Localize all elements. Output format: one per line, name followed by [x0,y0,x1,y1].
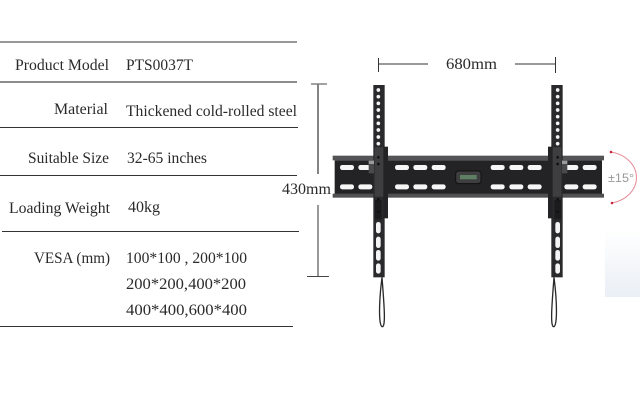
height dimension: 430mm: 430mm [282,181,331,198]
row: VESA: 200*200,400*200 [126,276,246,293]
row: material [54,101,297,120]
row: loading weight [9,199,160,217]
width dimension: 680mm [378,56,556,73]
spirit level [456,171,481,184]
table rules [0,42,299,326]
row: product model: Product Model [15,57,109,74]
tilt indicator: plus or minus 15 degrees [608,151,636,204]
row: product model [15,57,194,74]
row: suitable size: 32-65 inches [127,150,207,167]
faint backdrop patch [605,230,640,297]
wall mount bracket [333,85,604,327]
spec table [0,42,299,326]
right upright [548,85,567,327]
left upright [369,85,388,327]
row: material: Thickened cold-rolled steel [126,103,297,120]
row: VESA: VESA (mm) [34,250,110,267]
row: VESA: 100*100 , 200*100 [126,250,247,267]
row: VESA [34,250,247,319]
width dimension: 680mm: 680mm [446,56,497,73]
row: suitable size [28,150,207,167]
row: VESA: 400*400,600*400 [126,302,247,319]
row: material: Material [54,101,108,118]
row: loading weight: 40kg [128,199,160,216]
row: product model: PTS0037T [126,57,194,74]
row: loading weight: Loading Weight [9,200,111,217]
horizontal rail [333,156,604,198]
tilt indicator: plus or minus 15 degrees: ±15° [608,173,634,185]
row: suitable size: Suitable Size [28,150,109,167]
